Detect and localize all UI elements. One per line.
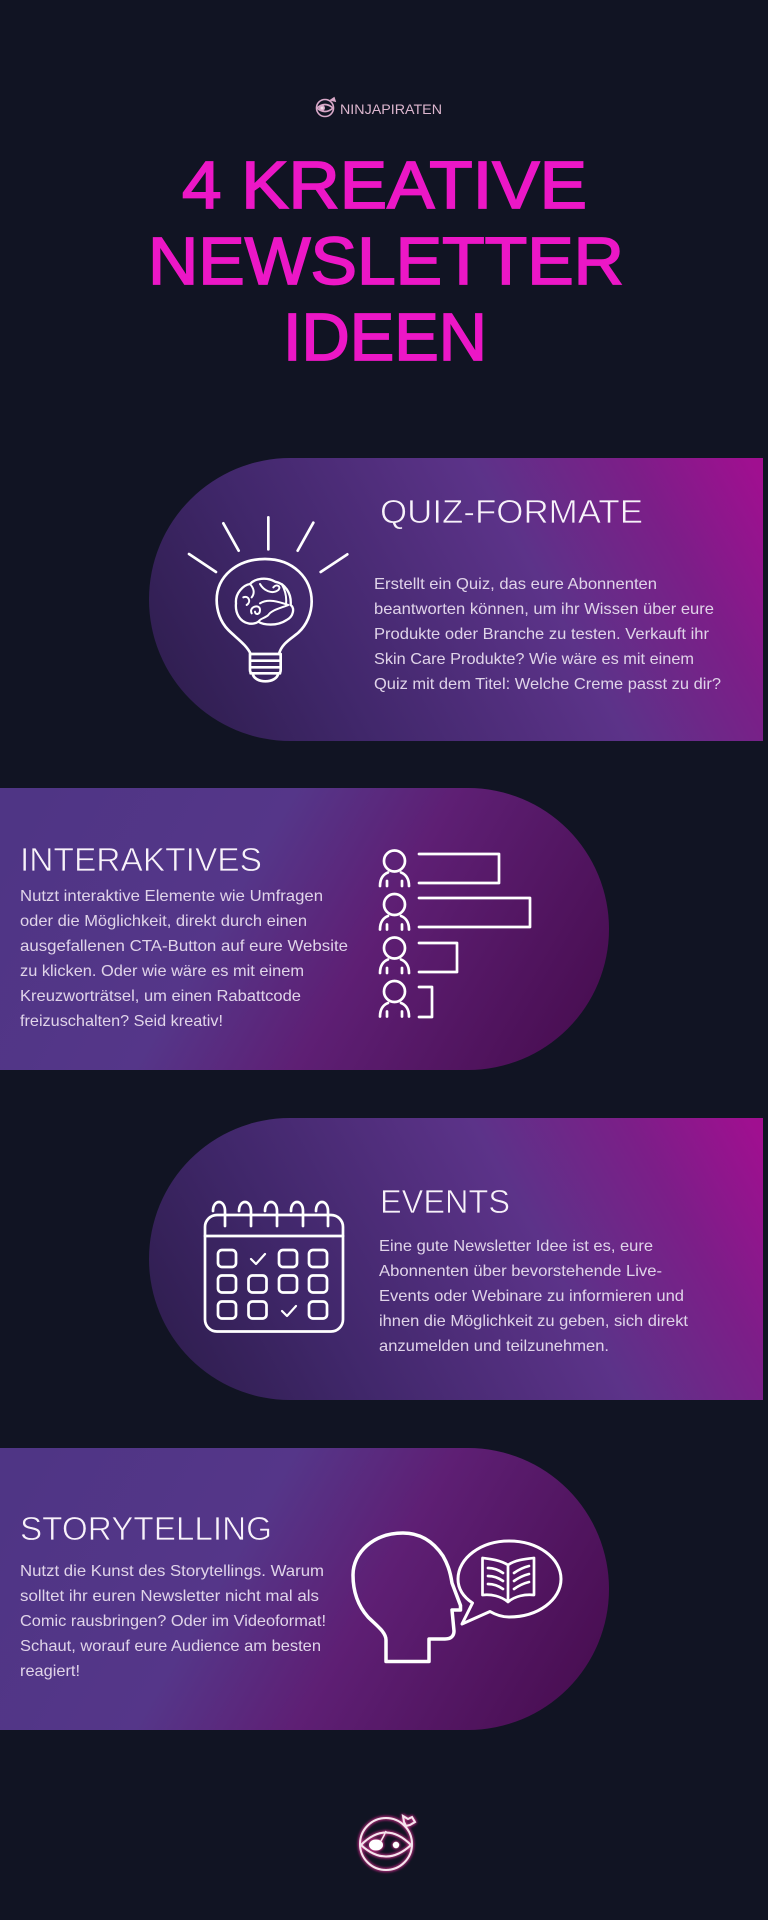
icon: audience poll bar chart <box>380 850 530 1017</box>
body text: Comic rausbringen? Oder im Videoformat! <box>20 1613 326 1630</box>
body text: ausgefallenen CTA-Button auf eure Website <box>20 938 348 955</box>
body text <box>20 888 348 1030</box>
body text: Produkte oder Branche zu testen. Verkauft ihr <box>374 626 710 643</box>
body text: reagiert! <box>20 1663 80 1680</box>
body text: Skin Care Produkte? Wie wäre es mit einem <box>374 651 694 668</box>
body text: beantworten können, um ihr Wissen über eure <box>374 601 714 618</box>
panel: Quiz-Formate <box>149 458 763 741</box>
logo patch strap <box>381 1831 386 1841</box>
panel background <box>0 1448 609 1730</box>
icon: calendar <box>205 1202 343 1332</box>
icon: head with speech bubble and book <box>353 1533 561 1662</box>
panel: Interaktives <box>0 788 609 1070</box>
panel background <box>149 458 763 741</box>
icon: light bulb with brain <box>189 517 347 681</box>
title <box>148 148 624 375</box>
body text: solltet ihr euren Newsletter nicht mal als <box>20 1588 319 1605</box>
heading: STORYTELLING <box>20 1510 272 1547</box>
panel: Storytelling <box>0 1448 609 1730</box>
body text: Quiz mit dem Titel: Welche Creme passt zu dir? <box>374 676 721 693</box>
heading: INTERAKTIVES <box>20 841 262 878</box>
body text: Abonnenten über bevorstehende Live- <box>379 1263 662 1280</box>
heading: QUIZ-FORMATE <box>380 493 643 530</box>
panel background <box>149 1118 763 1400</box>
body text: Kreuzworträtsel, um einen Rabattcode <box>20 988 301 1005</box>
panel background <box>0 788 609 1070</box>
body text: Events oder Webinare zu informieren und <box>379 1288 684 1305</box>
body text <box>379 1238 689 1355</box>
body text: Nutzt die Kunst des Storytellings. Warum <box>20 1563 324 1580</box>
icon: small ninja pirate logo <box>316 98 335 116</box>
logo eye band <box>361 1832 411 1856</box>
body text: oder die Möglichkeit, direkt durch einen <box>20 913 307 930</box>
title: NEWSLETTER <box>148 224 624 299</box>
logo head circle <box>360 1818 412 1870</box>
logo eye patch and pupil <box>369 1840 399 1850</box>
body text: Eine gute Newsletter Idee ist es, eure <box>379 1238 653 1255</box>
body text: zu klicken. Oder wie wäre es mit einem <box>20 963 304 980</box>
panel: Events <box>149 1118 763 1400</box>
body text <box>20 1563 326 1680</box>
body text: ihnen die Möglichkeit zu geben, sich direkt <box>379 1313 689 1330</box>
body text: Schaut, worauf eure Audience am besten <box>20 1638 321 1655</box>
heading: EVENTS <box>380 1183 510 1220</box>
logo bow <box>403 1816 415 1826</box>
body text: anzumelden und teilzunehmen. <box>379 1338 609 1355</box>
footer logo <box>360 1816 415 1870</box>
brand name: NINJAPIRATEN <box>340 102 442 117</box>
body text: Erstellt ein Quiz, das eure Abonnenten <box>374 576 657 593</box>
title: IDEEN <box>283 300 487 375</box>
body text <box>374 576 721 693</box>
brand header: logo and name <box>316 98 442 117</box>
body text: freizuschalten? Seid kreativ! <box>20 1013 223 1030</box>
body text: Nutzt interaktive Elemente wie Umfragen <box>20 888 323 905</box>
title: 4 KREATIVE <box>182 148 587 223</box>
